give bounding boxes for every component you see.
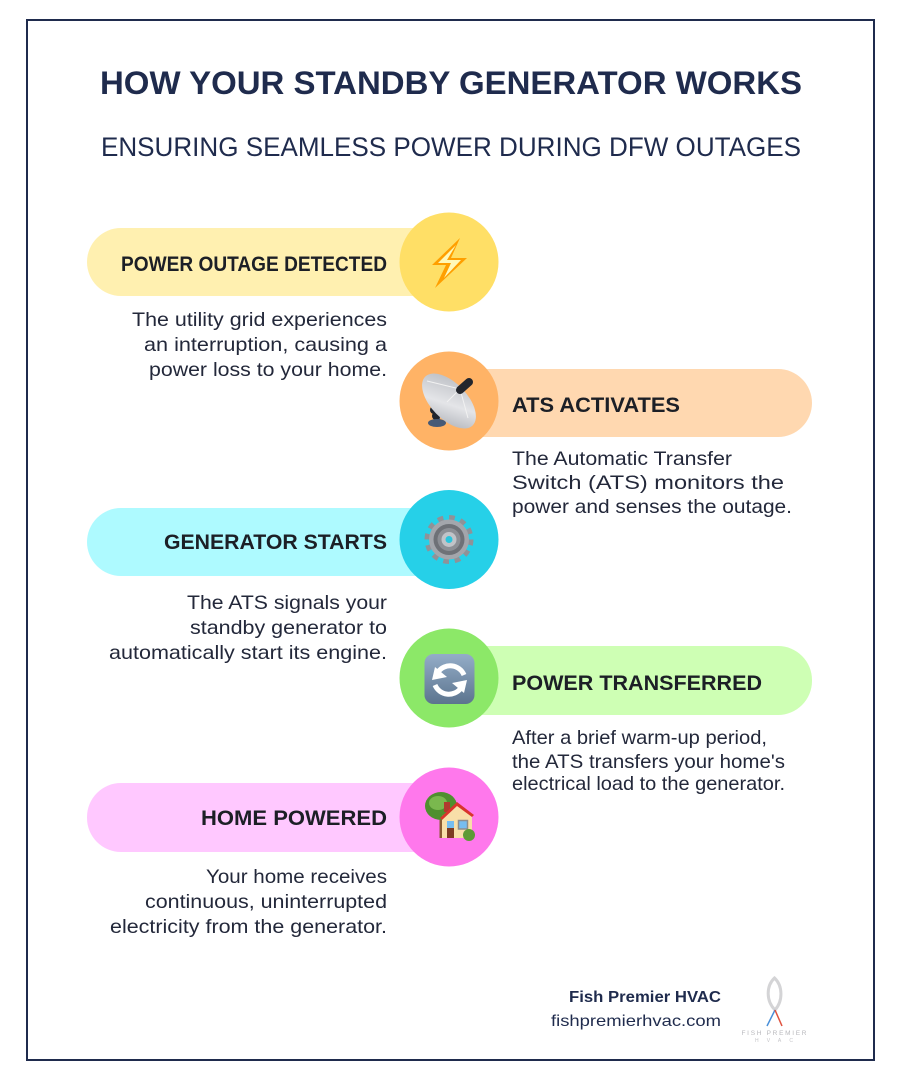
step 4 heading: POWER TRANSFERRED	[512, 672, 762, 695]
icon: lightning bolt	[432, 238, 467, 288]
subtitle: ENSURING SEAMLESS POWER DURING DFW OUTAGES	[101, 132, 801, 162]
title: HOW YOUR STANDBY GENERATOR WORKS	[100, 65, 802, 101]
logo: HVAC	[755, 1038, 793, 1044]
step 5 circle	[400, 768, 498, 866]
step 4 circle	[400, 628, 498, 728]
step 4 description	[512, 727, 785, 795]
step 4 pill	[449, 646, 812, 715]
step 5 heading: HOME POWERED	[201, 807, 387, 830]
step 5 description: Your home receives	[206, 866, 387, 888]
step 1 circle	[400, 212, 498, 312]
step 1 heading: POWER OUTAGE DETECTED	[121, 253, 387, 276]
step 4 description: After a brief warm-up period,	[512, 727, 767, 749]
step 1 description: an interruption, causing a	[144, 334, 387, 356]
icon: gear	[428, 518, 470, 561]
step 1 description: The utility grid experiences	[132, 309, 387, 331]
icon: satellite dish	[412, 364, 486, 438]
step 5 pill	[87, 783, 449, 852]
step 3 description: automatically start its engine.	[109, 642, 387, 664]
step 2: ATS activates	[400, 352, 812, 518]
company name: Fish Premier HVAC	[569, 989, 721, 1006]
step 3 circle	[400, 490, 498, 589]
step 2 description	[512, 448, 792, 518]
step 5 description	[110, 866, 387, 938]
step 2 heading: ATS ACTIVATES	[512, 394, 680, 417]
step 3 pill	[87, 508, 449, 576]
step 4 description: electrical load to the generator.	[512, 773, 785, 795]
step 2 description: power and senses the outage.	[512, 496, 792, 518]
step 3 description: The ATS signals your	[187, 592, 388, 614]
step 4: power transferred	[400, 628, 812, 795]
footer brand	[551, 989, 721, 1030]
step 1 description	[132, 309, 387, 381]
step 1: power outage detected	[87, 212, 498, 381]
step 2 pill	[449, 369, 812, 437]
step 2 description: The Automatic Transfer	[512, 448, 733, 470]
step 3 heading: GENERATOR STARTS	[164, 531, 387, 554]
website: fishpremierhvac.com	[551, 1013, 721, 1030]
step 5: home powered	[87, 768, 498, 938]
logo: FISH PREMIER	[742, 1030, 807, 1037]
step 5 description: electricity from the generator.	[110, 916, 387, 938]
step 4 description: the ATS transfers your home's	[512, 751, 785, 773]
logo	[742, 978, 807, 1044]
step 3: generator starts	[87, 490, 498, 664]
step 5 description: continuous, uninterrupted	[145, 891, 387, 913]
step 2 description: Switch (ATS) monitors the	[512, 472, 784, 494]
step 2 circle	[400, 352, 498, 450]
step 3 description: standby generator to	[190, 617, 387, 639]
icon: refresh arrows	[424, 654, 474, 704]
step 1 description: power loss to your home.	[149, 359, 387, 381]
icon: house with tree	[425, 792, 475, 841]
step 1 pill	[87, 228, 449, 296]
step 3 description	[109, 592, 388, 664]
